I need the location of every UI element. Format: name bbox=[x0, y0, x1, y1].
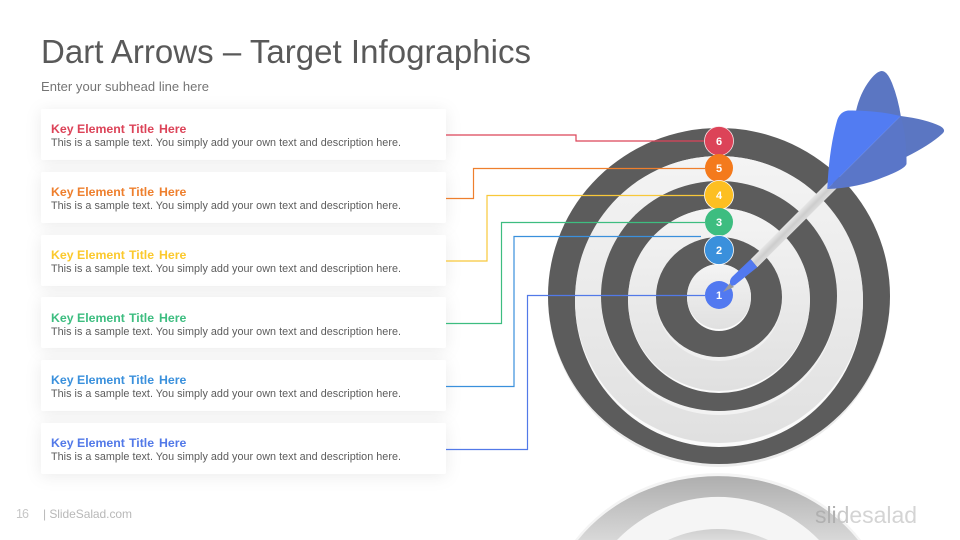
card 2 blue: Title bbox=[129, 373, 154, 387]
card 5 orange: Title bbox=[129, 185, 154, 199]
card 3 green: Here bbox=[159, 311, 187, 325]
marker 3: 3 bbox=[716, 217, 722, 229]
marker 4 bbox=[704, 180, 734, 210]
marker 3 bbox=[705, 208, 733, 236]
marker 2: 2 bbox=[716, 245, 722, 257]
target board bbox=[548, 128, 890, 467]
dart arrow bbox=[723, 71, 944, 292]
marker 1 bbox=[705, 281, 733, 309]
card 1 indigo: Key bbox=[51, 436, 74, 450]
marker 5 bbox=[705, 154, 733, 182]
card 5 orange: This is a sample text. You simply add your own text and description here. bbox=[51, 200, 401, 212]
card 4 yellow: Key bbox=[51, 248, 74, 262]
footer brand: | SlideSalad.com bbox=[43, 507, 132, 521]
card 4 yellow: Element bbox=[77, 248, 125, 262]
panel: key element cards bbox=[41, 109, 446, 474]
card 2 blue: Element bbox=[77, 373, 125, 387]
card 1 indigo: This is a sample text. You simply add your own text and description here. bbox=[51, 451, 401, 463]
dart shaft bbox=[751, 181, 838, 267]
marker 1: 1 bbox=[716, 290, 722, 302]
card 6 red bbox=[41, 109, 446, 160]
numbered markers bbox=[704, 126, 734, 309]
card 3 green: Key bbox=[51, 311, 74, 325]
watermark logo: slidesalad bbox=[815, 502, 917, 528]
marker 4: 4 bbox=[716, 190, 723, 202]
marker 6 bbox=[704, 126, 734, 156]
title: Dart Arrows – Target Infographics bbox=[41, 33, 531, 70]
card 3 green: Title bbox=[129, 311, 154, 325]
card 2 blue: Here bbox=[159, 373, 187, 387]
connector lines bbox=[446, 135, 705, 450]
page number: 16 bbox=[16, 507, 29, 521]
front flight dark half bbox=[827, 116, 907, 189]
card 1 indigo bbox=[41, 423, 446, 474]
card 4 yellow bbox=[41, 235, 446, 286]
dart needle bbox=[723, 283, 734, 292]
dart tip bbox=[730, 259, 757, 286]
card 4 yellow: This is a sample text. You simply add your own text and description here. bbox=[51, 263, 401, 275]
card 2 blue: This is a sample text. You simply add your own text and description here. bbox=[51, 388, 401, 400]
card 1 indigo: Here bbox=[159, 436, 187, 450]
card 6 red: Here bbox=[159, 122, 187, 136]
card 3 green bbox=[41, 297, 446, 348]
card 5 orange bbox=[41, 172, 446, 223]
card 2 blue: Key bbox=[51, 373, 74, 387]
marker 2 bbox=[704, 236, 734, 264]
marker 6: 6 bbox=[716, 136, 722, 148]
front flight bright half bbox=[827, 110, 901, 189]
card 6 red: Title bbox=[129, 122, 154, 136]
card 1 indigo: Element bbox=[77, 436, 125, 450]
card 3 green: Element bbox=[77, 311, 125, 325]
card 3 green: This is a sample text. You simply add your own text and description here. bbox=[51, 326, 401, 338]
card 5 orange: Element bbox=[77, 185, 125, 199]
card 4 yellow: Here bbox=[159, 248, 187, 262]
card 6 red: Key bbox=[51, 122, 74, 136]
card 5 orange: Key bbox=[51, 185, 74, 199]
card 2 blue bbox=[41, 360, 446, 411]
card 6 red: This is a sample text. You simply add your own text and description here. bbox=[51, 137, 401, 149]
subhead: Enter your subhead line here bbox=[41, 79, 209, 94]
card 4 yellow: Title bbox=[129, 248, 154, 262]
marker 5: 5 bbox=[716, 163, 722, 175]
back fin bbox=[856, 71, 901, 117]
right fin bbox=[901, 116, 944, 157]
target reflection bbox=[575, 473, 861, 540]
card 1 indigo: Title bbox=[129, 436, 154, 450]
card 6 red: Element bbox=[77, 122, 125, 136]
card 5 orange: Here bbox=[159, 185, 187, 199]
